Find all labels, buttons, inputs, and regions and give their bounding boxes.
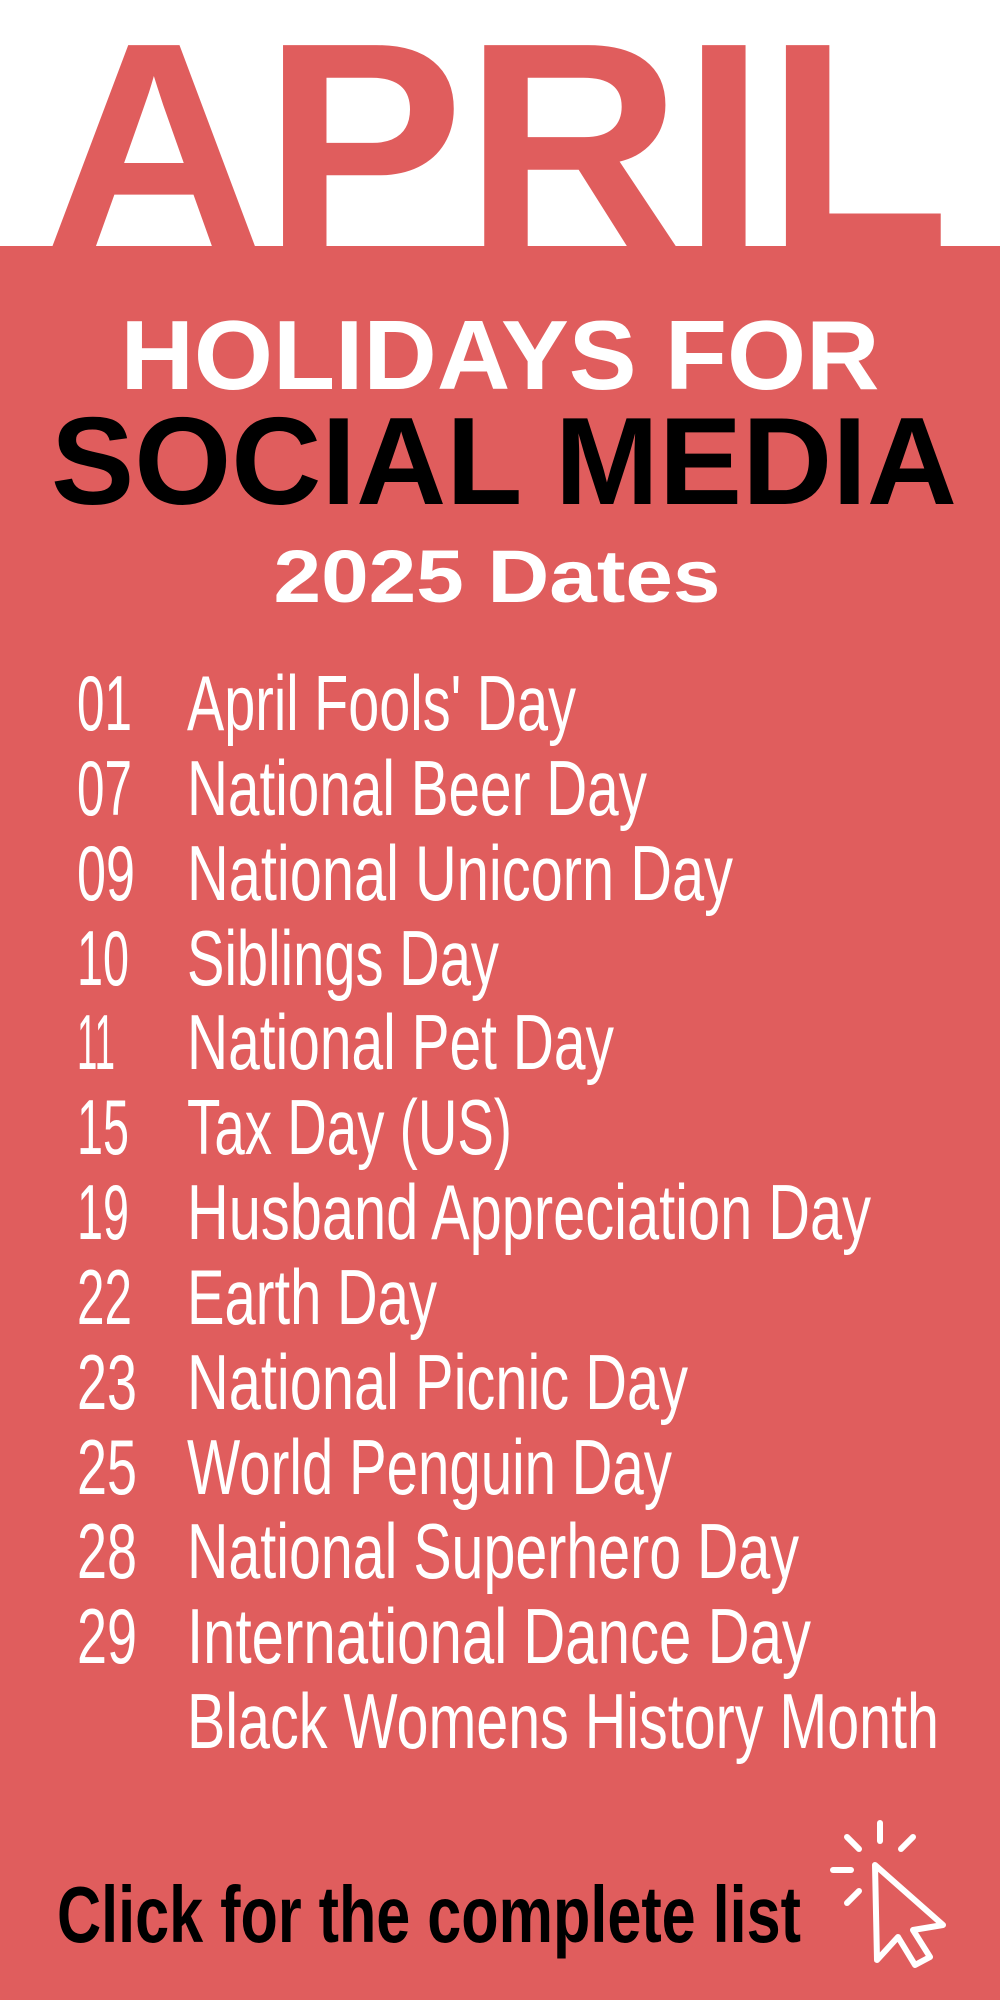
holiday list: Siblings Day <box>187 914 499 1002</box>
holiday list: 11 <box>77 998 115 1086</box>
holiday list <box>77 660 939 1765</box>
holiday list: 01 <box>77 660 132 747</box>
holiday list: National Beer Day <box>187 744 647 832</box>
holiday list: 09 <box>77 829 135 917</box>
holiday list: 25 <box>77 1423 137 1511</box>
icon: click cursor <box>830 1820 946 1968</box>
holiday list: 15 <box>77 1083 129 1171</box>
holiday list: 29 <box>77 1592 137 1680</box>
holiday list: Earth Day <box>187 1253 437 1341</box>
holiday list: 10 <box>77 914 129 1002</box>
holiday list: National Picnic Day <box>187 1338 688 1426</box>
holiday list: 23 <box>77 1338 137 1426</box>
holiday list: April Fools' Day <box>187 660 576 747</box>
holiday list: 19 <box>77 1168 129 1256</box>
holiday list: International Dance Day <box>187 1592 811 1680</box>
holiday list: 22 <box>77 1253 132 1341</box>
holiday list: National Superhero Day <box>187 1507 799 1595</box>
holiday list: 07 <box>77 744 132 832</box>
holiday list: National Pet Day <box>187 998 614 1086</box>
holiday list: Tax Day (US) <box>187 1083 512 1171</box>
holiday list: National Unicorn Day <box>187 829 733 917</box>
holiday list: World Penguin Day <box>187 1423 672 1511</box>
holiday list: 28 <box>77 1507 137 1595</box>
